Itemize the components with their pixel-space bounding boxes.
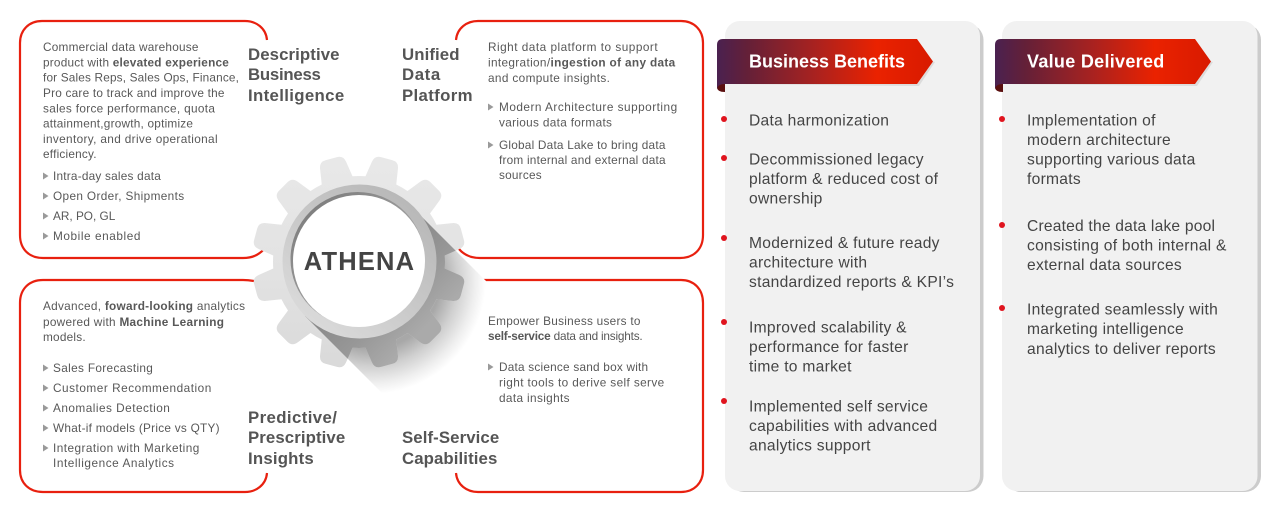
benefits list: platform & reduced cost of <box>749 171 939 188</box>
bullet dots <box>999 116 1005 311</box>
heading: Descriptive <box>248 45 340 64</box>
bullet list: sources <box>499 168 542 182</box>
panel: business benefits <box>717 21 984 492</box>
benefits list: ownership <box>749 190 823 208</box>
bullet list <box>488 100 678 182</box>
bullet list: Intelligence Analytics <box>53 456 175 470</box>
heading: Predictive/ <box>248 408 337 427</box>
heading: Data <box>402 65 441 84</box>
heading: Capabilities <box>402 449 497 468</box>
benefits list: standardized reports & KPI’s <box>749 274 954 291</box>
value list: supporting various data <box>1027 152 1196 168</box>
body text: Right data platform to support <box>488 40 658 54</box>
bullet list: from internal and external data <box>499 153 666 167</box>
bullet list: Integration with Marketing <box>53 441 200 455</box>
bullet list <box>43 169 184 243</box>
panel outline <box>456 280 703 492</box>
body text: Empower Business users to <box>488 314 641 328</box>
card <box>728 24 984 492</box>
benefits list: Decommissioned legacy <box>749 152 924 168</box>
bullet list <box>43 361 220 470</box>
panel outline <box>20 21 267 258</box>
bullet list: Modern Architecture supporting <box>499 100 678 114</box>
card <box>1005 24 1261 492</box>
bullet list <box>488 360 665 405</box>
panel: descriptive business intelligence <box>20 21 345 258</box>
value list: consisting of both internal & <box>1027 238 1227 254</box>
body text: Commercial data warehouse <box>43 40 199 54</box>
value list: Created the data lake pool <box>1027 218 1215 235</box>
body text: powered with Machine Learning <box>43 315 224 329</box>
panel: predictive / prescriptive insights <box>20 280 345 492</box>
bullet list: right tools to derive self serve <box>499 376 665 390</box>
value list: formats <box>1027 171 1081 188</box>
bullet list: Intra-day sales data <box>53 169 161 183</box>
bullet list: Anomalies Detection <box>53 401 170 415</box>
bullet list: Data science sand box with <box>499 360 648 374</box>
body text: attainment,growth, optimize <box>43 116 193 130</box>
body text: self-service data and insights. <box>488 329 642 343</box>
panel: unified data platform <box>402 21 703 258</box>
body text: for Sales Reps, Sales Ops, Finance, <box>43 70 239 84</box>
body text: efficiency. <box>43 147 97 161</box>
heading: Insights <box>248 449 314 468</box>
value list: modern architecture <box>1027 132 1171 149</box>
ribbon title: Value Delivered <box>1027 52 1165 72</box>
long shadow on gear <box>305 217 464 368</box>
bullet list: Sales Forecasting <box>53 361 153 375</box>
value list: external data sources <box>1027 257 1182 274</box>
benefits list: Data harmonization <box>749 112 889 130</box>
panel: self-service capabilities <box>402 280 703 492</box>
body text: inventory, and drive operational <box>43 132 218 146</box>
icon: athena gear <box>254 156 486 388</box>
value list: Integrated seamlessly with <box>1027 302 1218 318</box>
gear body with teeth <box>254 156 464 368</box>
heading: Platform <box>402 86 473 105</box>
heading: Unified <box>402 45 460 64</box>
body text: product with elevated experience <box>43 56 229 70</box>
bullet list: What-if models (Price vs QTY) <box>53 421 220 435</box>
bullet dots <box>721 116 727 404</box>
body text: sales force performance, quota <box>43 102 215 116</box>
benefits list: architecture with <box>749 254 867 272</box>
ribbon title: Business Benefits <box>749 52 905 72</box>
heading: Prescriptive <box>248 428 345 447</box>
benefits list: performance for faster <box>749 339 909 356</box>
body text: integration/ingestion of any data <box>488 56 676 70</box>
white centre <box>293 195 425 327</box>
value list: Implementation of <box>1027 112 1156 130</box>
value list: analytics to deliver reports <box>1027 341 1216 358</box>
soft outer shadow <box>348 250 486 388</box>
benefits list: Modernized & future ready <box>749 235 940 252</box>
benefits list: capabilities with advanced <box>749 418 937 435</box>
bullet list: Open Order, Shipments <box>53 189 184 203</box>
ribbon banner <box>717 39 935 92</box>
benefits list: Implemented self service <box>749 398 928 416</box>
heading: Business <box>248 65 321 84</box>
bullet list: data insights <box>499 391 570 405</box>
benefits list: analytics support <box>749 438 871 454</box>
benefits list: time to market <box>749 358 852 376</box>
outer ring <box>282 184 436 338</box>
body text: Advanced, foward-looking analytics <box>43 299 245 313</box>
bullet list: Global Data Lake to bring data <box>499 138 666 152</box>
body text: models. <box>43 330 86 344</box>
bullet list: various data formats <box>499 116 612 130</box>
inner crescent <box>290 192 424 326</box>
ribbon banner <box>995 39 1213 92</box>
body text: and compute insights. <box>488 71 610 85</box>
panel outline <box>456 21 703 258</box>
gear label: ATHENA <box>304 248 415 276</box>
bullet list: Customer Recommendation <box>53 381 212 395</box>
benefits list: Improved scalability & <box>749 320 907 336</box>
panel: value delivered <box>995 21 1261 492</box>
bullet list: Mobile enabled <box>53 229 141 243</box>
bullet list: AR, PO, GL <box>53 209 116 223</box>
value list: marketing intelligence <box>1027 321 1184 338</box>
panel outline <box>20 280 267 492</box>
heading: Self-Service <box>402 428 499 447</box>
heading: Intelligence <box>248 86 345 105</box>
body text: Pro care to track and improve the <box>43 86 225 100</box>
